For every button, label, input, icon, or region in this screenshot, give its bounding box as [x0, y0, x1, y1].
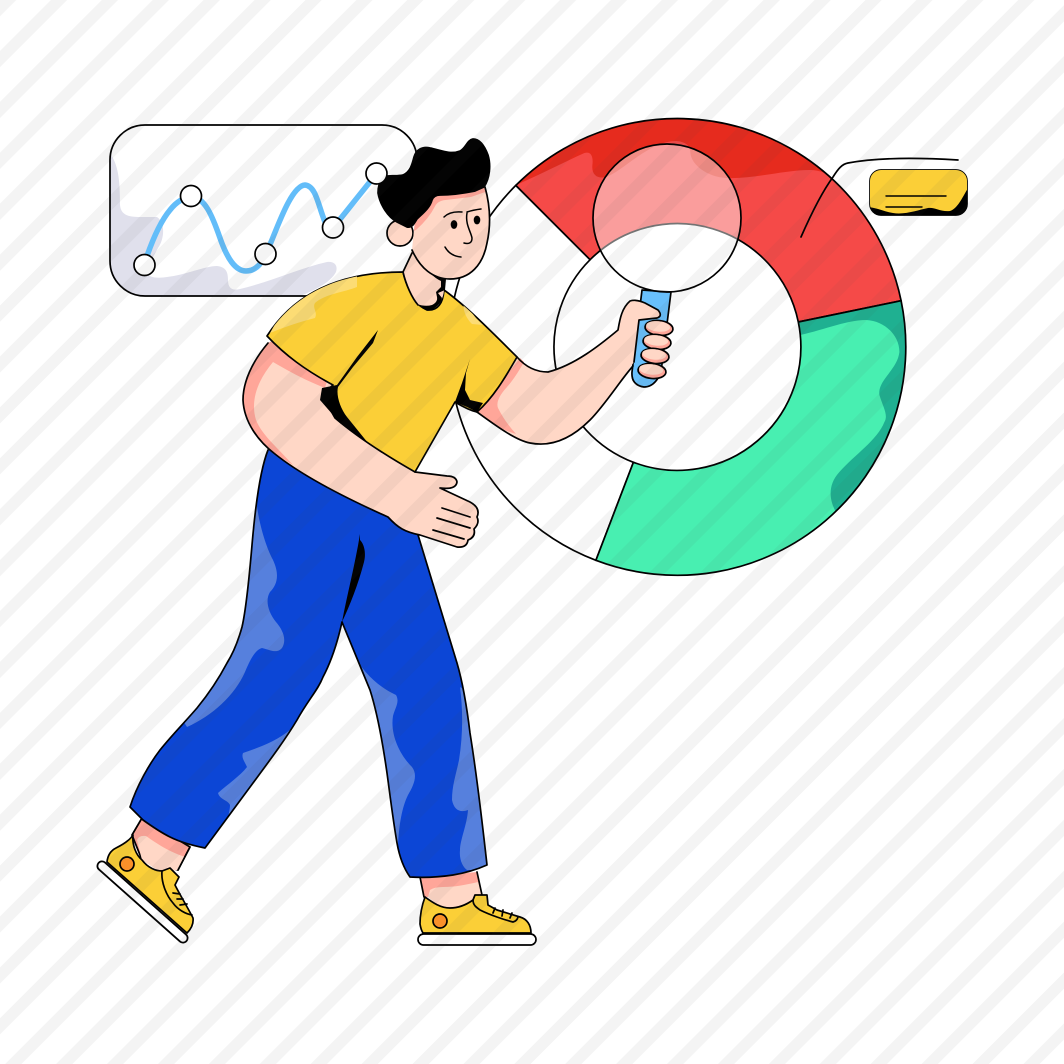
mouth — [445, 247, 461, 257]
neck — [403, 250, 446, 309]
magnifying glass — [593, 144, 741, 387]
magnifier handle — [632, 290, 671, 387]
trousers highlights — [184, 506, 486, 870]
right ankle — [420, 872, 482, 908]
left ankle — [132, 818, 190, 872]
shirt fold shadow right — [455, 359, 483, 412]
right shoe — [418, 895, 536, 945]
hair — [378, 139, 490, 227]
shirt highlights — [270, 276, 483, 333]
callout card — [868, 168, 968, 215]
eyes — [451, 216, 480, 229]
green segment — [596, 290, 929, 575]
right arm — [477, 300, 660, 444]
person — [102, 139, 674, 945]
line chart panel — [110, 125, 417, 296]
yellow t-shirt — [267, 268, 517, 472]
last chart point above hair — [366, 163, 387, 184]
donut chart — [449, 100, 929, 575]
ear — [387, 220, 413, 246]
gripping fingers — [637, 319, 674, 380]
head — [378, 139, 490, 279]
chin shadow and collar — [417, 266, 446, 310]
blue trousers — [130, 445, 500, 877]
shirt fold shadow left — [320, 330, 378, 443]
magnifier lens — [593, 144, 741, 292]
white segment — [449, 185, 633, 560]
face — [412, 185, 490, 279]
red segment — [509, 100, 901, 322]
callout leader line — [801, 158, 958, 237]
trousers crotch shadow — [342, 534, 365, 622]
eyebrows and nose — [444, 209, 481, 243]
left arm and hand — [243, 335, 478, 547]
left shoe — [102, 835, 193, 938]
